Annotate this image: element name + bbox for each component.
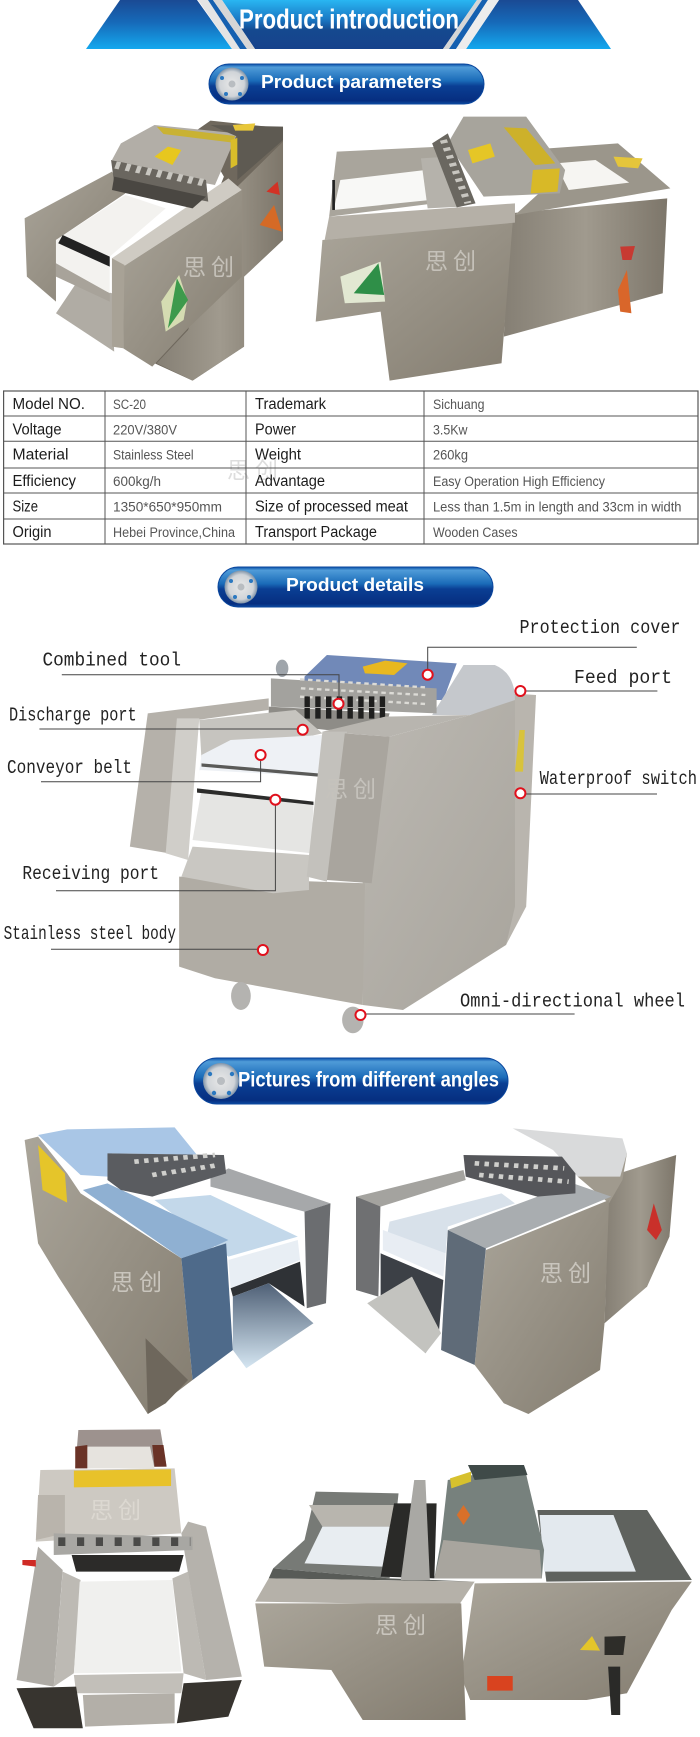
specification table: Size of processed meat <box>255 498 409 516</box>
table watermark: 思创 <box>227 457 283 483</box>
callout: Conveyor belt: Conveyor belt <box>7 757 132 779</box>
callout: Discharge port: Discharge port <box>9 705 137 727</box>
callout: Waterproof switch <box>515 768 697 798</box>
product photo: machine right angle <box>356 1128 676 1414</box>
specification table: Stainless Steel <box>113 448 194 462</box>
product photo: machine rear right view <box>316 117 670 381</box>
watermark: first photo: 思创 <box>183 254 239 280</box>
section heading: Product parameters: Product parameters <box>261 72 442 92</box>
specification table: 220V/380V <box>113 422 177 438</box>
watermark: top-down photo: 思创 <box>90 1497 146 1523</box>
specification table: Power <box>255 422 296 438</box>
callout: Conveyor belt <box>7 750 266 782</box>
product photo: machine top-down view <box>17 1429 242 1728</box>
specification table: Model NO. <box>12 396 85 413</box>
callout: Omni-directional wheel <box>356 991 685 1020</box>
product photo: machine left angle <box>25 1127 330 1414</box>
callout: Stainless steel body: Stainless steel body <box>4 923 176 945</box>
section heading: Pictures from different angles: Pictures from different angles <box>238 1068 499 1092</box>
watermark: 思创 <box>325 776 381 802</box>
section heading: Product parameters <box>209 64 484 104</box>
specification table: Less than 1.5m in length and 33cm in width <box>433 500 682 514</box>
specification table: 3.5Kw <box>433 422 468 438</box>
callout: Protection cover <box>423 617 680 680</box>
specification table: Transport Package <box>255 524 377 541</box>
specification table: Easy Operation High Efficiency <box>433 474 605 489</box>
specification table: 260kg <box>433 448 468 462</box>
section heading: Pictures from different angles <box>194 1058 508 1104</box>
callout: Discharge port <box>9 705 308 735</box>
specification table: Size <box>12 498 38 516</box>
specification table: Trademark <box>255 396 326 413</box>
callout: Receiving port <box>22 795 280 891</box>
specification table: 600kg/h <box>113 474 161 489</box>
title banner: Product introduction <box>86 0 611 49</box>
product photo: machine front left view <box>25 121 283 381</box>
callout: Combined tool <box>42 650 344 709</box>
callout: Feed port <box>515 667 672 696</box>
product photo: machine side-top view <box>255 1465 692 1720</box>
callout: Receiving port: Receiving port <box>22 863 159 885</box>
specification table: Hebei Province,China <box>113 525 235 540</box>
watermark: right angle photo: 思创 <box>540 1260 596 1286</box>
specification table: Voltage <box>12 422 62 438</box>
machine illustration <box>130 655 536 1033</box>
watermark: second photo: 思创 <box>425 248 481 274</box>
specification table: Advantage <box>255 473 325 490</box>
specification table <box>4 391 698 544</box>
labelled machine diagram <box>130 655 536 1033</box>
specification table: Sichuang <box>433 397 484 412</box>
specification table: 1350*650*950mm <box>113 500 222 514</box>
specification table: Efficiency <box>12 473 76 490</box>
specification table: SC-20 <box>113 397 146 412</box>
specification table: Wooden Cases <box>433 525 518 540</box>
specification table: Origin <box>12 524 52 541</box>
specification table: Weight <box>255 446 302 464</box>
section heading: Product details <box>218 567 493 607</box>
title banner: Product introduction: Product introduction <box>239 4 459 34</box>
callout: Combined tool: Combined tool <box>42 650 181 672</box>
watermark: left angle photo: 思创 <box>111 1269 167 1295</box>
callout: Stainless steel body <box>4 923 268 955</box>
callout: Feed port: Feed port <box>574 667 672 689</box>
watermark: side-top photo: 思创 <box>375 1612 431 1638</box>
callout: Protection cover: Protection cover <box>520 617 680 639</box>
section heading: Product details: Product details <box>286 575 424 595</box>
specification table: Material <box>12 446 68 464</box>
